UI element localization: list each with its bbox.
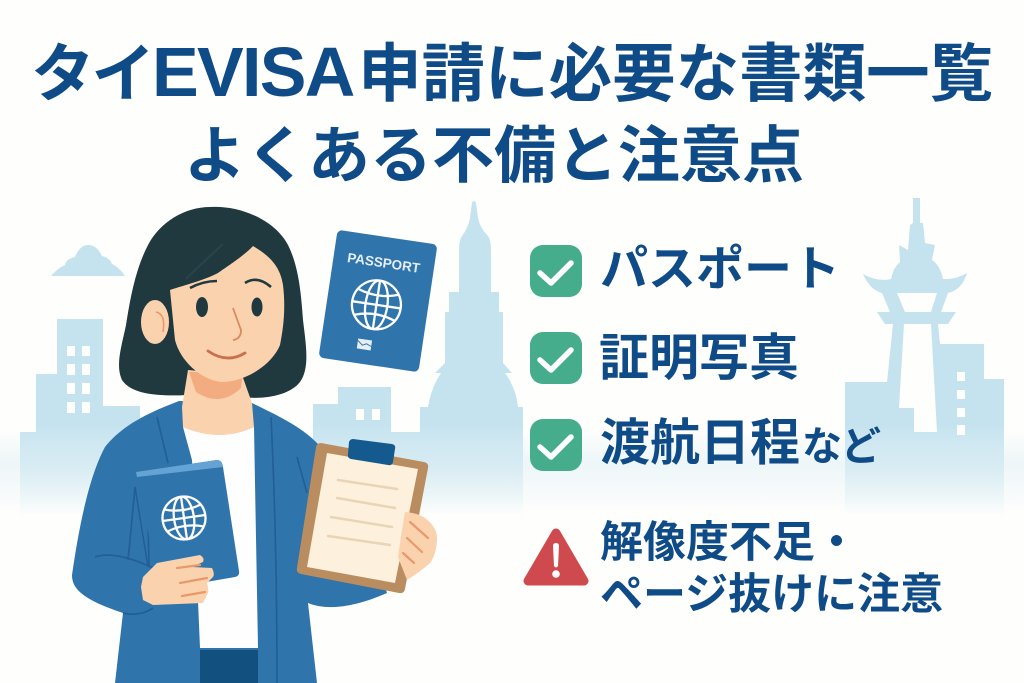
neck <box>182 370 254 436</box>
left hand <box>141 555 214 605</box>
warning text: 解像度不足・ <box>600 519 858 567</box>
floating passport: PASSPORT <box>346 250 422 276</box>
cardigan fold lines <box>95 417 307 683</box>
eyebrows <box>190 280 271 288</box>
ear <box>141 300 169 344</box>
mouth <box>208 351 245 358</box>
hair <box>119 207 306 398</box>
cardigan <box>72 401 387 683</box>
held passport <box>135 460 239 590</box>
shirt <box>183 427 258 648</box>
clipboard <box>297 439 428 593</box>
neck shadow <box>189 372 243 399</box>
nose <box>233 308 241 340</box>
checklist item: itinerary: 渡航日程など <box>600 415 880 471</box>
floating passport <box>319 230 437 372</box>
eyes <box>196 297 262 317</box>
warning icon <box>524 528 588 586</box>
person illustration <box>72 206 437 683</box>
title line 2: よくある不備と注意点 <box>184 122 804 191</box>
checklist item: photo: 証明写真 <box>599 330 799 386</box>
face <box>170 246 284 382</box>
hair strand <box>186 244 223 279</box>
title line 1: タイEVISA申請に必要な書類一覧 <box>31 33 993 111</box>
right hand <box>398 512 437 580</box>
trousers <box>200 650 258 683</box>
ear detail <box>156 312 164 332</box>
warning text <box>600 519 943 619</box>
warning text: ページ抜けに注意 <box>600 571 943 619</box>
checklist item: passport: パスポート <box>600 243 840 296</box>
title <box>31 33 993 191</box>
